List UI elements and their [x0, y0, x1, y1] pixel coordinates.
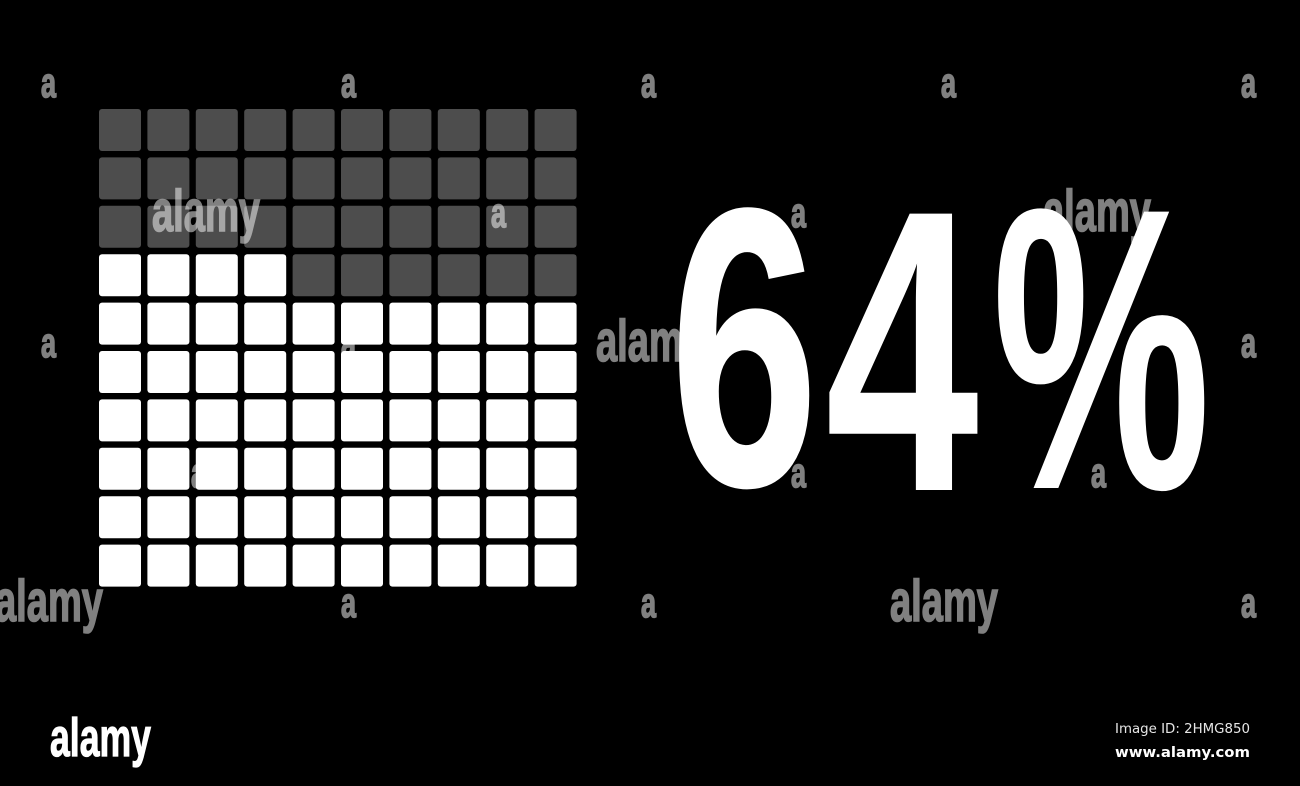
website url: www.alamy.com [1115, 745, 1250, 761]
watermark pattern: a [941, 59, 956, 106]
waffle chart: 64 of 100 squares filled [99, 109, 577, 587]
watermark pattern: a [641, 59, 656, 106]
watermark pattern: a [791, 449, 806, 496]
image id: Image ID: 2HMG850 [1115, 722, 1250, 737]
watermark pattern: a [341, 59, 356, 106]
watermark pattern: alamy [152, 179, 260, 244]
watermark pattern: alamy [890, 569, 998, 634]
watermark pattern: alamy [596, 309, 704, 374]
watermark pattern: a [41, 319, 56, 366]
watermark pattern [0, 59, 1256, 634]
filled squares [99, 254, 577, 587]
alamy logo: alamy [50, 708, 151, 768]
watermark pattern: a [341, 579, 356, 626]
watermark pattern: a [491, 189, 506, 236]
big percentage value: 6 [670, 128, 818, 569]
watermark pattern: a [641, 579, 656, 626]
watermark pattern: a [41, 59, 56, 106]
watermark pattern: a [1091, 449, 1106, 496]
big percentage value: 4 [825, 128, 981, 576]
watermark pattern: alamy [1043, 179, 1151, 244]
watermark pattern: a [1241, 319, 1256, 366]
unfilled squares [99, 109, 577, 296]
watermark pattern: a [1241, 59, 1256, 106]
watermark pattern: a [791, 189, 806, 236]
big percentage value [670, 124, 1211, 576]
watermark pattern: a [191, 449, 206, 496]
big percentage value: % [992, 124, 1211, 574]
watermark pattern: a [341, 319, 356, 366]
watermark pattern: a [1241, 579, 1256, 626]
